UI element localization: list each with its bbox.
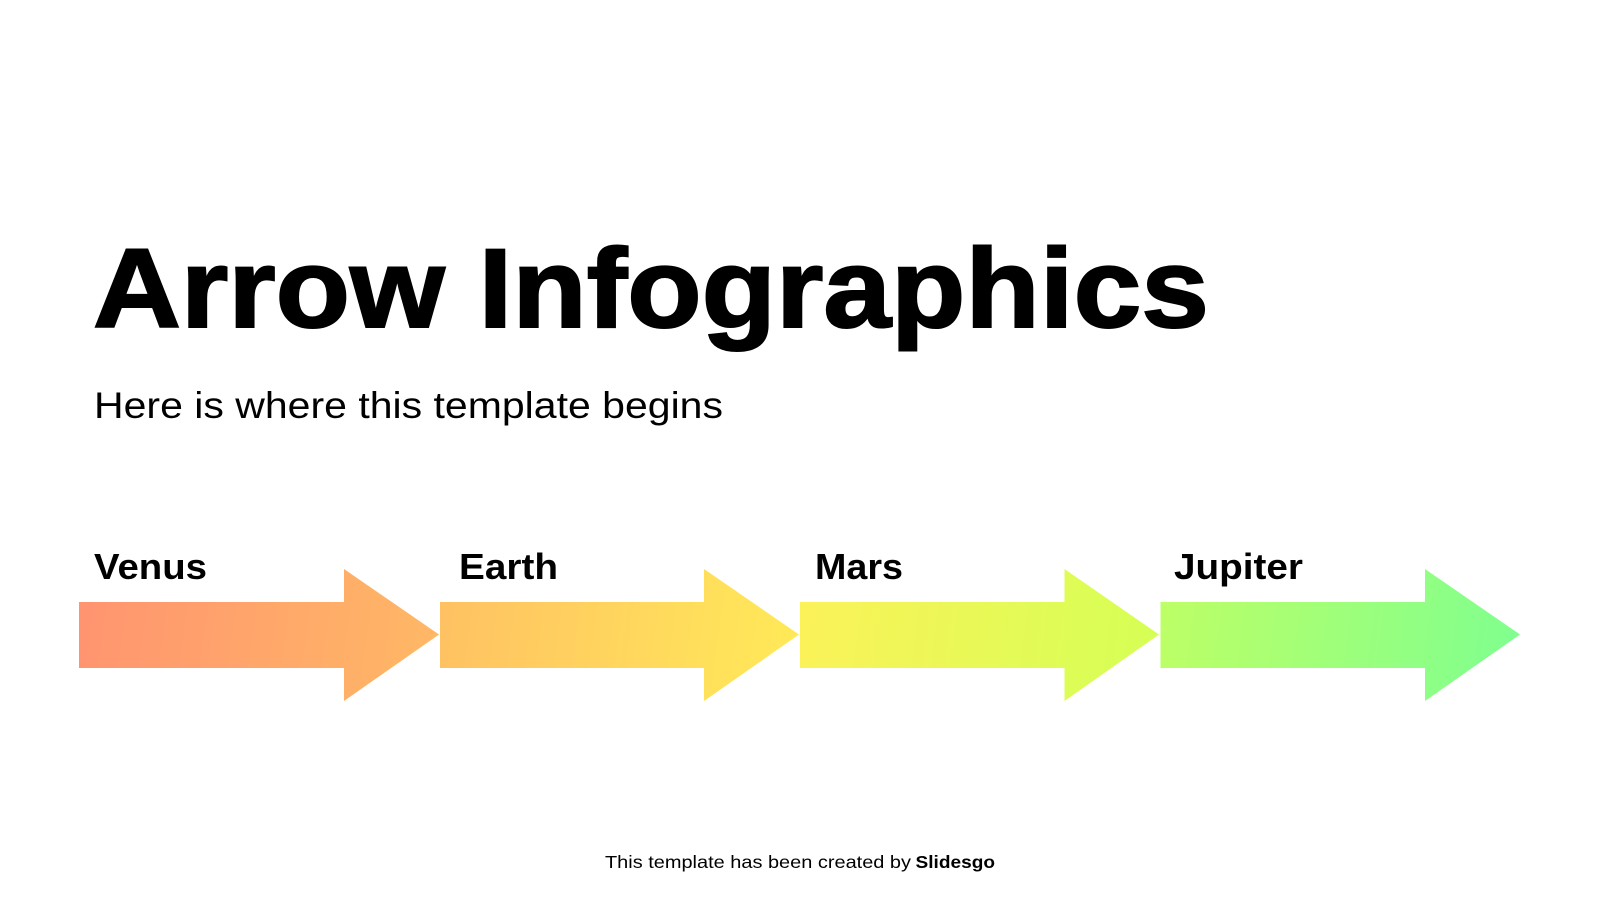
step: Earth (440, 546, 799, 701)
step: Jupiter (1160, 546, 1520, 701)
arrow: Venus (79, 569, 439, 701)
footer credit: Slidesgo (916, 852, 995, 872)
subtitle: Here is where this template begins (94, 385, 723, 426)
arrow: Mars (800, 569, 1159, 701)
step: Mars (800, 546, 1159, 701)
label: Earth: Earth (459, 546, 558, 587)
step: Venus (79, 546, 439, 701)
arrow: Earth (440, 569, 799, 701)
arrow: Jupiter (1160, 569, 1520, 701)
label: Jupiter: Jupiter (1174, 546, 1303, 587)
footer credit (605, 852, 995, 872)
title: Arrow Infographics (93, 226, 1209, 351)
label: Mars: Mars (815, 546, 903, 587)
footer credit: This template has been created by (605, 852, 911, 872)
label: Venus: Venus (94, 546, 207, 587)
